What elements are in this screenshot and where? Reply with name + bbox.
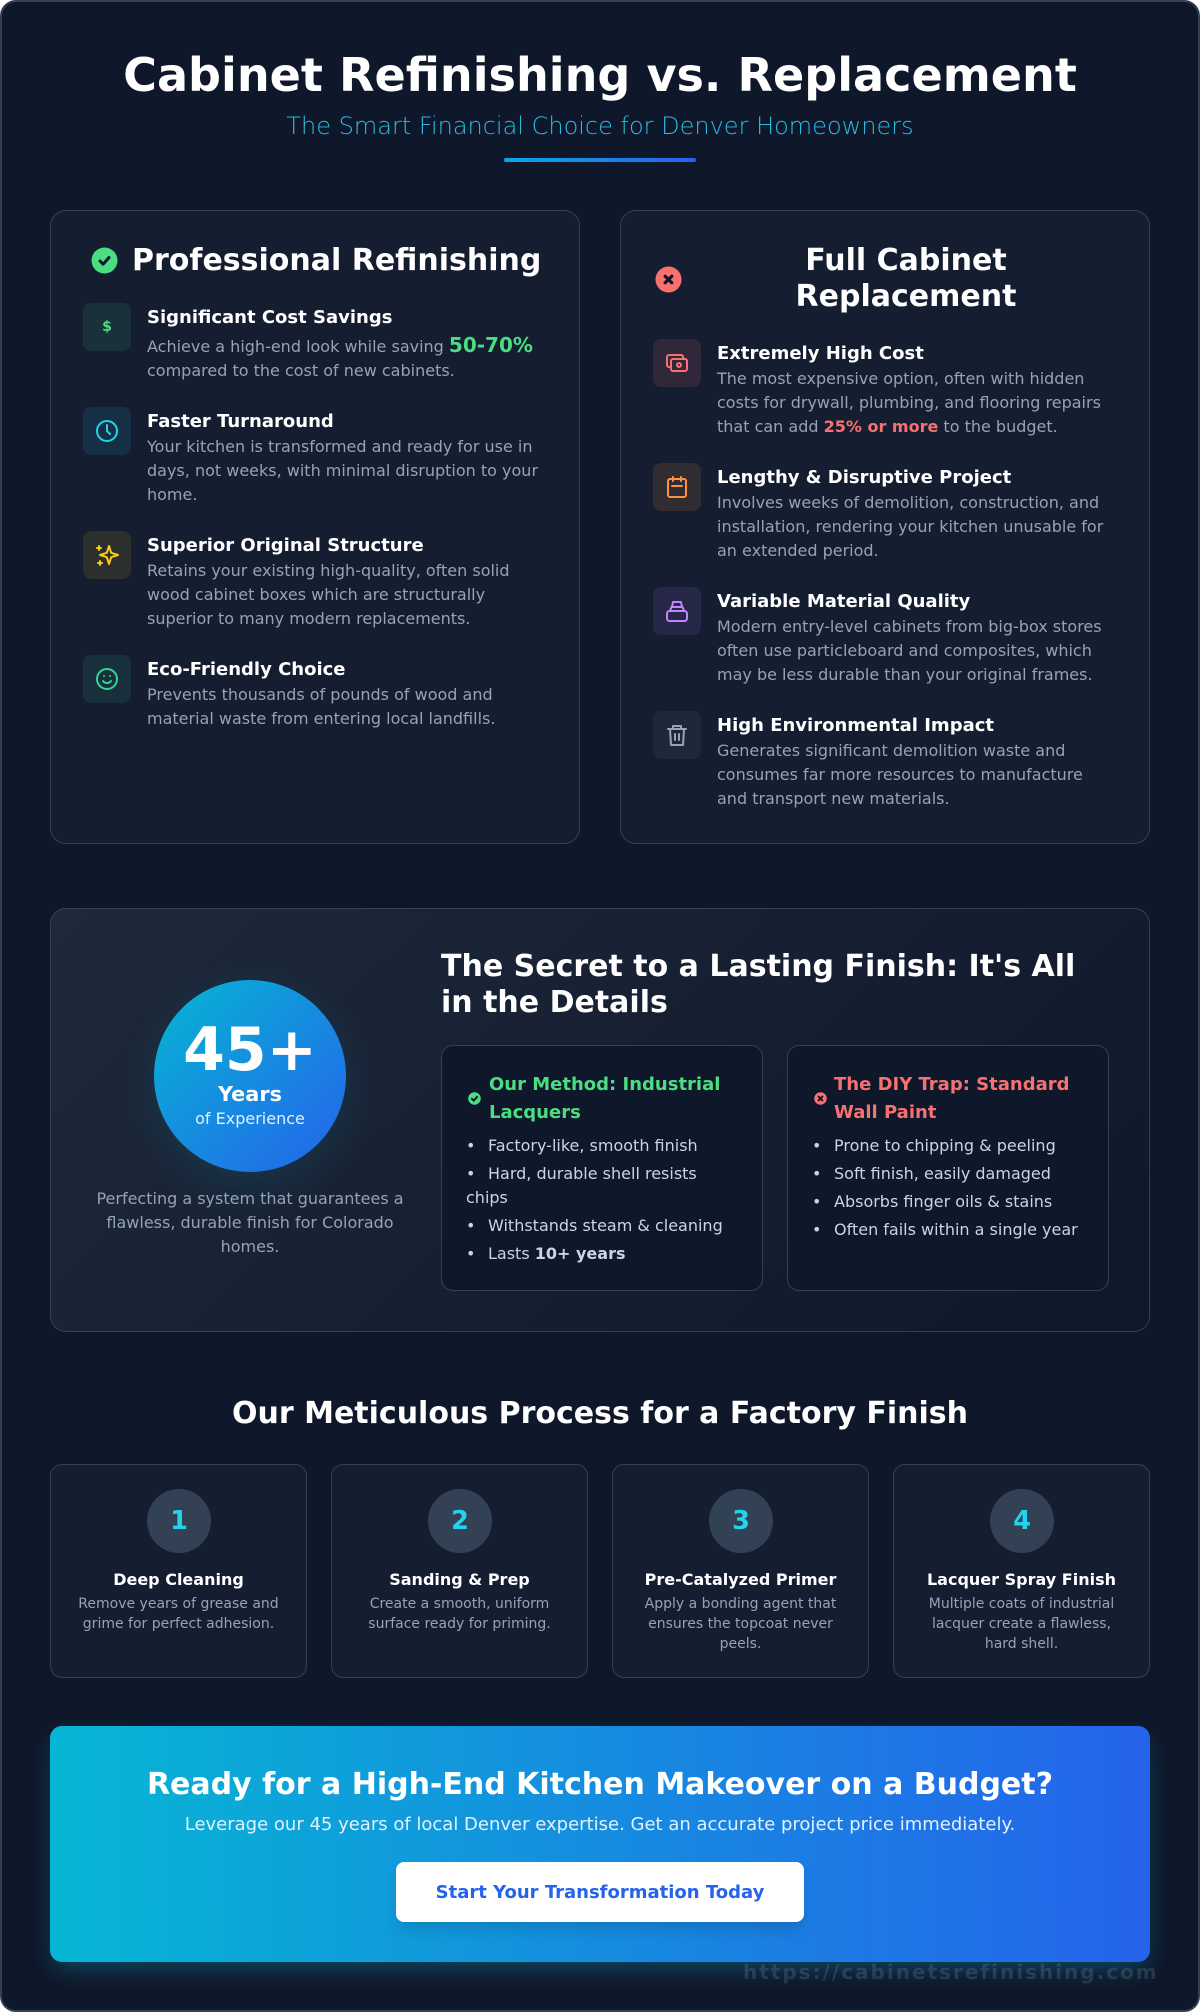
card heading: Wall Paint [834,1102,936,1123]
bullet list [812,1136,1078,1239]
item text [717,617,1102,684]
stat label: Years [218,1082,282,1106]
experience description: Perfecting a system that guarantees a [96,1189,404,1208]
cta button [396,1862,804,1922]
card heading: The DIY Trap: Standard [834,1074,1070,1095]
item text: days, not weeks, with minimal disruption to your [147,461,538,480]
panel: secret to a lasting finish [50,908,1150,1332]
item text: Retains your existing high-quality, often solid [147,561,510,580]
item text [717,741,1083,808]
heading: full cabinet replacement [796,243,1016,314]
card heading [489,1074,720,1123]
item: variable material quality [653,587,1102,684]
step number [428,1489,492,1553]
step number: 4 [1013,1506,1031,1536]
item text: material waste from entering local landfills. [147,709,495,728]
item title: Lengthy & Disruptive Project [717,467,1011,488]
step 4 [893,1464,1150,1678]
item text: that can add 25% or more to the budget. [717,417,1058,436]
card heading: Our Method: Industrial [489,1074,720,1095]
heading: process: Our Meticulous Process for a Factory Finish [232,1396,968,1431]
step number [147,1489,211,1553]
item text: compared to the cost of new cabinets. [147,361,455,380]
bullet list: Often fails within a single year [834,1220,1078,1239]
cta text: Leverage our 45 years of local Denver expertise. Get an accurate project price immediately. [185,1814,1015,1835]
step text [78,1596,279,1632]
cta heading: Ready for a High-End Kitchen Makeover on a Budget? [147,1767,1053,1802]
step text [368,1596,551,1632]
step number [709,1489,773,1553]
step number: 2 [451,1506,469,1536]
step text: lacquer create a flawless, [932,1616,1111,1632]
step 3 [612,1464,869,1678]
experience description [96,1189,404,1256]
heading: lasting finish [441,949,1075,1020]
badge: 45+ years of experience [154,980,346,1172]
step text: Apply a bonding agent that [645,1596,836,1612]
item text [716,369,1101,436]
bullet list: • [466,1216,475,1235]
item text: Achieve a high-end look while saving 50-70% [147,333,533,357]
item text: Your kitchen is transformed and ready for use in [147,437,532,456]
step title: Lacquer Spray Finish [927,1570,1116,1589]
item text [717,493,1104,560]
bullet list: Hard, durable shell resists [488,1164,697,1183]
call to action banner [50,1726,1150,1962]
step text: surface ready for priming. [368,1616,551,1632]
panel: full cabinet replacement [620,210,1150,844]
item text: Involves weeks of demolition, construction, and [717,493,1099,512]
heading: full cabinet replacement: Replacement [796,279,1016,314]
step text [929,1596,1114,1652]
item: lengthy and disruptive project [653,463,1104,560]
step text: ensures the topcoat never [648,1616,833,1632]
item: superior original structure [83,531,510,628]
card: our method [441,1045,763,1291]
panel: professional refinishing [50,210,580,844]
item title: Significant Cost Savings [147,307,392,328]
heading: lasting finish: The Secret to a Lasting Finish: It's All [441,949,1075,984]
item text: costs for drywall, plumbing, and flooring repairs [717,393,1101,412]
item text: The most expensive option, often with hidden [717,369,1084,388]
item text: and transport new materials. [717,789,950,808]
item: eco-friendly choice [83,655,495,728]
icon: sparkles [83,531,131,579]
bullet list: • [812,1136,821,1155]
item title: High Environmental Impact [717,715,994,736]
card heading [834,1074,1070,1123]
title: Cabinet Refinishing vs. Replacement [123,48,1077,102]
step title: Deep Cleaning [113,1570,244,1589]
bullet list: • [812,1192,821,1211]
step text: peels. [720,1636,761,1652]
item text [147,685,495,728]
step number [990,1489,1054,1553]
item: significant cost savings [83,303,533,380]
step 1 [50,1464,307,1678]
step text: Multiple coats of industrial [929,1596,1114,1612]
item: high environmental impact [653,711,1083,808]
bullet list: Lasts 10+ years [488,1244,625,1263]
bullet list: • [812,1164,821,1183]
icon: clock [83,407,131,455]
bullet list: chips [466,1188,508,1207]
icon: calendar [653,463,701,511]
stat sublabel: of Experience [195,1109,305,1128]
step text: grime for perfect adhesion. [83,1616,274,1632]
item text: Modern entry-level cabinets from big-box stores [717,617,1102,636]
subtitle: The Smart Financial Choice for Denver Homeowners [286,112,914,140]
item text: may be less durable than your original frames. [717,665,1093,684]
item title: Eco-Friendly Choice [147,659,346,680]
heading: full cabinet replacement: Full Cabinet [805,243,1007,278]
bullet list: • [466,1136,475,1155]
bullet list: • [812,1220,821,1239]
icon: cash [653,339,701,387]
item title: Faster Turnaround [147,411,334,432]
step text: hard shell. [985,1636,1058,1652]
item: extremely high cost [653,339,1101,436]
item title: Extremely High Cost [717,343,924,364]
step 2 [331,1464,588,1678]
heading: lasting finish: in the Details [441,985,668,1020]
icon: dollar: $ [102,319,112,335]
icon: red x [656,266,682,292]
item text: an extended period. [717,541,879,560]
step title: Pre-Catalyzed Primer [645,1570,836,1589]
bullet list: • [466,1244,475,1263]
step number: 1 [170,1506,188,1536]
icon: small red x [814,1092,827,1105]
step title: Sanding & Prep [389,1570,530,1589]
item text [147,437,538,504]
heading: professional refinishing: Professional Refinishing [132,243,541,278]
icon: trash [653,711,701,759]
experience description: flawless, durable finish for Colorado [106,1213,394,1232]
bullet list: Prone to chipping & peeling [834,1136,1056,1155]
title underline [504,158,696,162]
stat number: 45+ [183,1015,317,1085]
item text [147,333,533,380]
item text: installation, rendering your kitchen unusable for [717,517,1103,536]
bullet list [466,1136,723,1263]
item text: consumes far more resources to manufacture [717,765,1083,784]
icon: small green check [468,1092,481,1105]
cta button: Start Your Transformation Today [436,1882,764,1903]
item: faster turnaround [83,407,538,504]
step text: Remove years of grease and [78,1596,279,1612]
watermark url: https://cabinetsrefinishing.com [743,1960,1159,1984]
step text: Create a smooth, uniform [370,1596,549,1612]
item text: superior to many modern replacements. [147,609,470,628]
bullet list: Withstands steam & cleaning [488,1216,723,1235]
experience description: homes. [221,1237,279,1256]
item text: often use particleboard and composites, which [717,641,1092,660]
item text: Prevents thousands of pounds of wood and [147,685,493,704]
item title: Superior Original Structure [147,535,424,556]
step number: 3 [732,1506,750,1536]
icon: layers [653,587,701,635]
icon: green check [92,248,118,274]
step text [644,1596,836,1652]
item text: home. [147,485,197,504]
icon: smile [83,655,131,703]
card heading: Lacquers [489,1102,581,1123]
item text: Generates significant demolition waste and [717,741,1065,760]
item title: Variable Material Quality [717,591,970,612]
bullet list: • [466,1164,475,1183]
bullet list: Factory-like, smooth finish [488,1136,698,1155]
item text: wood cabinet boxes which are structurally [147,585,485,604]
bullet list: Soft finish, easily damaged [834,1164,1051,1183]
icon: dollar [83,303,131,351]
item text [147,561,510,628]
bullet list: Absorbs finger oils & stains [834,1192,1052,1211]
header [123,48,1077,162]
card: the diy trap [787,1045,1109,1291]
